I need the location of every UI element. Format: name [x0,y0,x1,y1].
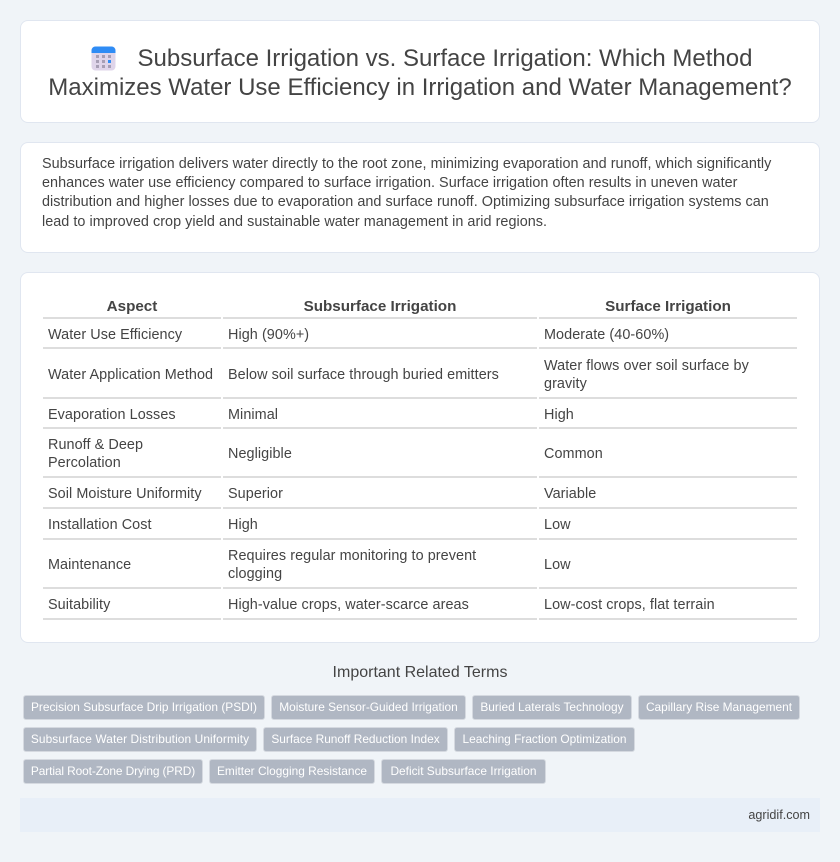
tag: Partial Root-Zone Drying (PRD) [31,764,195,778]
comparison table: Soil Moisture Uniformity [48,486,202,502]
tag [271,695,466,720]
comparison table: Low [544,557,571,573]
tag: Subsurface Water Distribution Uniformity [31,732,249,746]
tag: Surface Runoff Reduction Index [271,732,440,746]
comparison table: Percolation [48,455,121,471]
comparison table: Water Application Method [48,366,213,382]
tag: Moisture Sensor-Guided Irrigation [279,700,458,714]
comparison table: Runoff & Deep [48,437,143,453]
tag: Buried Laterals Technology [480,700,624,714]
comparison table: Aspect [107,298,157,315]
comparison table: High [228,517,258,533]
comparison table: Below soil surface through buried emitters [228,366,499,382]
tag [454,727,635,752]
comparison table: Low [544,517,571,533]
comparison table: Low-cost crops, flat terrain [544,597,715,613]
tag [472,695,632,720]
tag: Precision Subsurface Drip Irrigation (PSDI) [31,700,257,714]
intro text: lead to improved crop yield and sustainable water management in arid regions. [42,214,547,230]
related term tags [23,695,800,784]
comparison table: Minimal [228,406,278,422]
comparison table: gravity [544,376,587,392]
comparison table: Subsurface Irrigation [304,298,456,315]
intro text [42,156,772,230]
footer bar [20,798,820,832]
tag [23,695,265,720]
footer text: agridif.com [748,808,810,822]
heading: related terms: Important Related Terms [333,664,507,681]
comparison table: Surface Irrigation [605,298,731,315]
comparison table: Superior [228,486,283,502]
tag [209,759,375,784]
comparison table: Maintenance [48,557,131,573]
comparison table: Negligible [228,446,292,462]
title: Maximizes Water Use Efficiency in Irrigation and Water Management? [48,74,792,101]
panel: comparison table [20,272,820,643]
tag: Deficit Subsurface Irrigation [390,764,537,778]
panel: introduction [20,142,820,253]
title: Subsurface Irrigation vs. Surface Irrigation: Which Method [138,45,752,72]
comparison table [43,298,797,620]
comparison table: Water flows over soil surface by [544,358,749,374]
tag [263,727,448,752]
icon: calendar [92,46,116,70]
comparison table: Requires regular monitoring to prevent [228,548,476,564]
comparison table: Moderate (40-60%) [544,326,669,342]
comparison table: Suitability [48,597,110,613]
intro text: distribution and higher losses due to evaporation and surface runoff. Optimizing subsurface irrigation systems can [42,194,769,210]
comparison table: Evaporation Losses [48,406,176,422]
comparison table: clogging [228,566,282,582]
tag: Emitter Clogging Resistance [217,764,367,778]
intro text: Subsurface irrigation delivers water directly to the root zone, minimizing evaporation and runoff, which significantly [42,156,771,172]
comparison table: Common [544,446,603,462]
comparison table: High [544,406,574,422]
comparison table: High (90%+) [228,326,309,342]
title [48,45,792,101]
tag: Capillary Rise Management [646,700,792,714]
tag: Leaching Fraction Optimization [463,732,626,746]
tag [638,695,800,720]
header panel [20,20,820,123]
tag [23,727,257,752]
comparison table: Variable [544,486,596,502]
tag [381,759,546,784]
comparison table: Installation Cost [48,517,152,533]
comparison table: Water Use Efficiency [48,326,182,342]
tag [23,759,203,784]
comparison table: High-value crops, water-scarce areas [228,597,469,613]
intro text: enhances water use efficiency compared to surface irrigation. Surface irrigation often results in uneven water [42,175,738,191]
